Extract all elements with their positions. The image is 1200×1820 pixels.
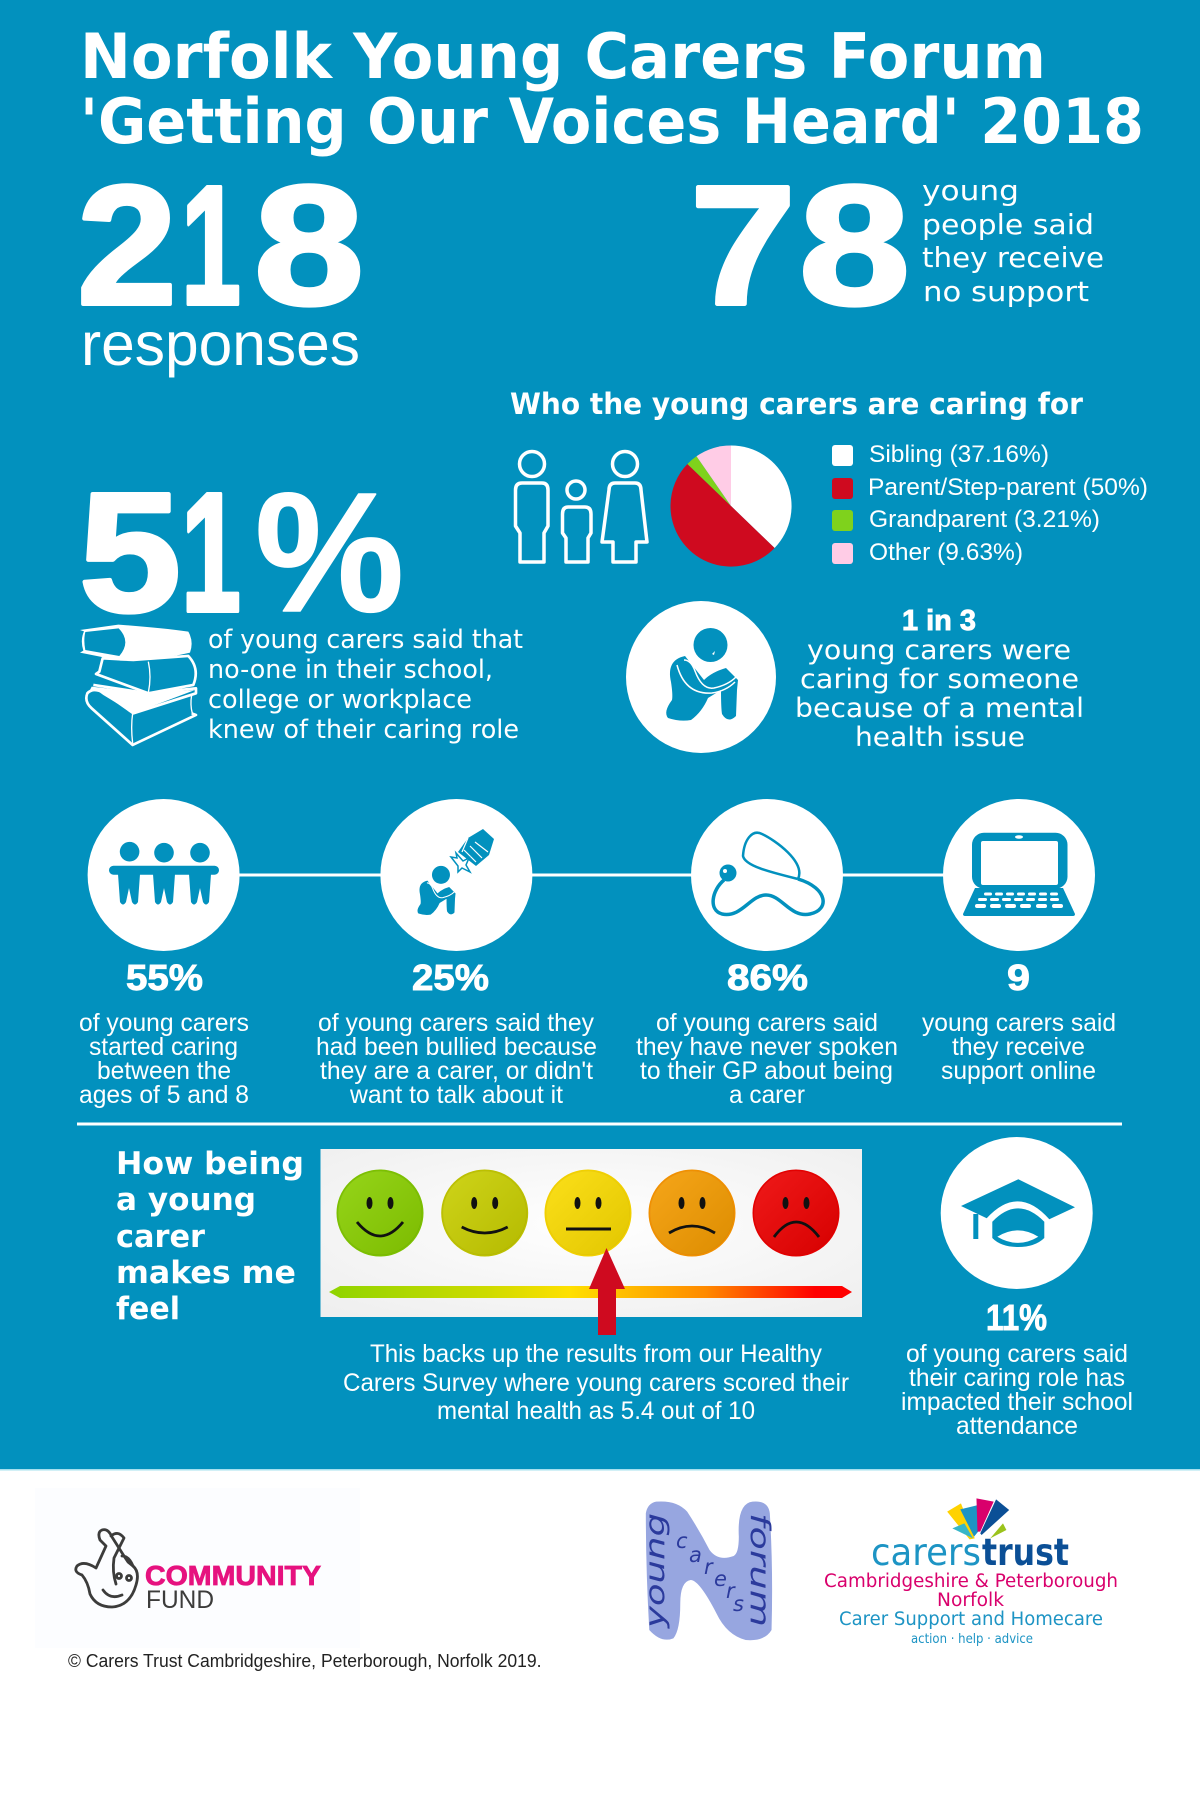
text: healthy carers survey note: Carers Survey where young carers scored their <box>343 1370 849 1397</box>
panel: 11 percent: impacted their school <box>901 1388 1133 1416</box>
panel: 55 percent: between the <box>97 1057 231 1085</box>
logo: young carers forum <box>640 1501 775 1640</box>
logo: carers trust: Cambridgeshire & Peterborough <box>824 1571 1118 1592</box>
panel: 11 percent: 11% <box>986 1297 1047 1338</box>
legend: Other (9.63%) <box>869 539 1023 566</box>
panel: 1 in 3 mental health <box>626 601 1084 753</box>
logo: young carers forum: carers <box>676 1529 744 1616</box>
stat: 78 no support: 7 <box>690 151 796 341</box>
face: neutral <box>546 1170 630 1256</box>
stat: 218 responses: 8 <box>254 151 364 341</box>
icon: stethoscope <box>691 799 843 951</box>
panel: 86 percent: to their GP about being <box>640 1057 893 1085</box>
logo: community fund: FUND <box>146 1586 214 1614</box>
stat: 51 percent <box>79 458 523 745</box>
panel: 55 percent: started caring <box>89 1033 238 1061</box>
panel: 55 percent <box>79 799 249 1109</box>
panel: 25 percent: of young carers said they <box>318 1009 594 1037</box>
text: healthy carers survey note: This backs up the results from our Healthy <box>370 1341 823 1368</box>
logo: carers trust: Norfolk <box>937 1590 1004 1611</box>
stat: 51 percent: 1 <box>181 458 241 648</box>
stat: 78 no support: they receive <box>922 241 1104 274</box>
text: healthy carers survey note <box>343 1341 849 1425</box>
heading: how being a young carer makes me feel: a young <box>116 1182 256 1218</box>
panel: 25 percent: 25% <box>412 957 489 998</box>
icon: crossed fingers hand <box>76 1530 137 1607</box>
heading: how being a young carer makes me feel: makes me <box>116 1255 296 1291</box>
stat: 78 no support: people said <box>922 208 1094 241</box>
face: very sad <box>754 1170 838 1256</box>
face: sad <box>650 1170 734 1256</box>
panel: 11 percent: of young carers said <box>906 1340 1128 1368</box>
logo: carers trust: trust <box>982 1531 1069 1574</box>
panel: 86 percent: of young carers said <box>656 1009 878 1037</box>
logo: carers trust: Carer Support and Homecare <box>839 1609 1103 1630</box>
panel: 1 in 3 mental health: health issue <box>855 722 1025 753</box>
legend: Sibling (37.16%) <box>869 441 1049 468</box>
stat: 78 no support: no support <box>923 275 1089 308</box>
stat: 218 responses: 1 <box>181 151 241 341</box>
heading: how being a young carer makes me feel: How being <box>116 1146 304 1182</box>
heading: how being a young carer makes me feel <box>116 1146 304 1327</box>
text: healthy carers survey note: mental health as 5.4 out of 10 <box>437 1398 755 1425</box>
panel: 25 percent <box>316 799 597 1109</box>
stat: 218 responses <box>77 151 364 378</box>
stat: 51 percent: college or workplace <box>208 685 472 715</box>
logo: carers trust: carers <box>871 1531 981 1574</box>
panel: 25 percent: want to talk about it <box>349 1081 563 1109</box>
gradient scale bar <box>329 1286 852 1298</box>
heading: who the young carers are caring for: Who the young carers are caring for <box>510 387 1084 421</box>
stat: 51 percent: % <box>255 458 404 648</box>
panel: 55 percent: 55% <box>126 957 203 998</box>
title: Norfolk Young Carers Forum <box>80 20 1046 93</box>
panel: 1 in 3 mental health: young carers were <box>807 635 1071 666</box>
panel: 86 percent: 86% <box>727 957 808 998</box>
stat: 51 percent: 5 <box>79 458 181 648</box>
panel: 11 percent: their caring role has <box>909 1364 1125 1392</box>
logo: young carers forum: young <box>640 1513 671 1629</box>
stat: 218 responses: responses <box>81 310 360 378</box>
panel: 9 young carers online: support online <box>941 1057 1096 1085</box>
heading: how being a young carer makes me feel: carer <box>116 1219 206 1255</box>
stat: 78 no support <box>690 151 1104 341</box>
logo: community fund: COMMUNITY <box>145 1560 321 1591</box>
logo: community fund <box>35 1488 360 1648</box>
logo: carers trust <box>824 1498 1118 1647</box>
face: very happy <box>338 1170 422 1256</box>
panel: 11 percent <box>901 1137 1133 1440</box>
logo: carers trust: action · help · advice <box>911 1631 1033 1647</box>
panel: 55 percent: of young carers <box>79 1009 249 1037</box>
stat: 78 no support: young <box>922 174 1019 207</box>
panel: 9 young carers online <box>922 799 1116 1085</box>
panel: 1 in 3 mental health: 1 in 3 <box>902 605 976 637</box>
icon: three people <box>88 799 240 951</box>
icon: bullied person and fist <box>380 799 532 951</box>
icon: family outline <box>516 452 647 562</box>
panel: 9 young carers online: 9 <box>1007 957 1030 998</box>
stat: 51 percent: of young carers said that <box>208 625 523 655</box>
heading: how being a young carer makes me feel: feel <box>116 1291 180 1327</box>
stat: 51 percent: no-one in their school, <box>208 655 493 685</box>
pie chart <box>670 445 792 567</box>
panel: 9 young carers online: young carers said <box>922 1009 1116 1037</box>
copyright: © Carers Trust Cambridgeshire, Peterborough, Norfolk 2019. <box>68 1650 542 1671</box>
panel: 25 percent: had been bullied because <box>316 1033 597 1061</box>
legend <box>832 441 1148 566</box>
icon: carers trust fan <box>947 1498 1009 1539</box>
stat: 218 responses: 2 <box>77 151 177 341</box>
legend: Parent/Step-parent (50%) <box>868 474 1148 501</box>
legend: Grandparent (3.21%) <box>869 506 1100 533</box>
icon: laptop <box>943 799 1095 951</box>
panel: 1 in 3 mental health: caring for someone <box>800 664 1079 695</box>
panel: mood scale <box>320 1149 862 1317</box>
panel: 86 percent: they have never spoken <box>636 1033 898 1061</box>
stat: 51 percent: knew of their caring role <box>208 715 519 745</box>
face: happy <box>442 1170 527 1256</box>
panel: 86 percent: a carer <box>729 1081 805 1109</box>
panel: 11 percent: attendance <box>956 1412 1078 1440</box>
icon: stack of books <box>80 625 196 745</box>
panel: 86 percent <box>636 799 898 1109</box>
logo: young carers forum: forum <box>744 1513 775 1627</box>
panel: 55 percent: ages of 5 and 8 <box>79 1081 249 1109</box>
panel: 9 young carers online: they receive <box>952 1033 1085 1061</box>
icon: graduation cap <box>941 1137 1093 1289</box>
title: 'Getting Our Voices Heard' 2018 <box>80 85 1144 158</box>
title <box>80 20 1144 158</box>
stat: 78 no support: 8 <box>799 151 910 341</box>
panel: 25 percent: they are a carer, or didn't <box>320 1057 593 1085</box>
icon: crouching person <box>626 601 776 753</box>
arrow: red pointer <box>589 1248 625 1335</box>
panel: 1 in 3 mental health: because of a mental <box>795 693 1084 724</box>
